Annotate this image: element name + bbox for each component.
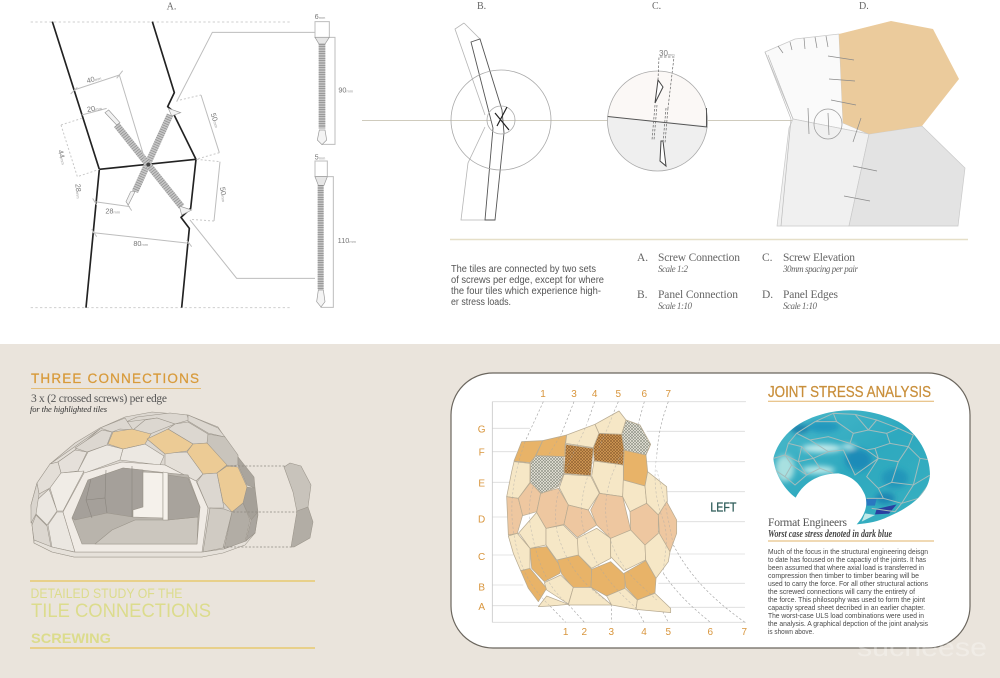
legend: D. — [762, 289, 773, 301]
analysis body text: been assumed that where axial load is transferred in — [768, 563, 924, 572]
screw 90mm: 6mm — [315, 12, 326, 21]
column numbers top: 3 — [571, 389, 577, 400]
dome caption — [768, 517, 934, 541]
column numbers top — [540, 389, 672, 400]
callout lines — [177, 32, 315, 278]
row letters: D — [478, 514, 485, 525]
screw 110mm — [315, 153, 357, 307]
dimensions: 50 mm — [218, 186, 229, 203]
legend: Scale 1:10 — [658, 301, 692, 311]
row letters — [478, 425, 486, 613]
column numbers bottom: 4 — [641, 627, 647, 638]
orange tile — [839, 21, 959, 134]
joint lines — [773, 413, 930, 512]
removed tiles — [284, 463, 313, 547]
legend: C. — [762, 252, 773, 264]
tile map chart — [478, 389, 748, 638]
door opening — [72, 466, 200, 544]
screw marks — [778, 36, 877, 201]
lower pale tile — [777, 119, 869, 226]
background: lower beige band — [0, 344, 1000, 678]
screw 110mm: 110mm — [338, 236, 357, 245]
column numbers bottom: 2 — [582, 627, 588, 638]
row letters: F — [479, 447, 485, 458]
subtitle block: SCREWING — [31, 630, 111, 646]
intro text: of screws per edge, except for where — [451, 275, 604, 286]
legend — [637, 252, 858, 311]
legend: A. — [637, 252, 648, 264]
legend: Scale 1:2 — [658, 264, 688, 274]
analysis body text: the force. This philosophy was used to form the joint — [768, 595, 926, 604]
base strip — [34, 533, 255, 557]
column numbers bottom: 5 — [666, 627, 672, 638]
column numbers top: 6 — [642, 389, 648, 400]
left label: LEFT — [710, 499, 736, 514]
analysis body text: the analysis. A graphical depction of the joint analysis — [768, 619, 928, 628]
watermark: sucheese — [857, 632, 987, 662]
screw 90mm — [315, 12, 354, 145]
column numbers bottom: 3 — [609, 627, 615, 638]
horizontal section line — [362, 120, 793, 122]
legend: B. — [637, 289, 648, 301]
intro text: er stress loads. — [451, 297, 511, 308]
legend: Screw Connection — [658, 252, 740, 264]
left edge and circle — [765, 52, 793, 226]
dashed projection lines — [223, 466, 297, 547]
row letters: B — [478, 582, 485, 593]
heading: three connections: for the highlighted tiles — [30, 404, 108, 414]
screw cross — [105, 108, 192, 215]
analysis body text: The worst-case ULS load combinations were used in — [768, 611, 924, 620]
legend: Screw Elevation — [783, 252, 855, 264]
white rounded panel — [451, 373, 970, 648]
crossed screws — [495, 107, 509, 130]
subtitle block — [30, 581, 315, 648]
circle lower half — [607, 116, 707, 171]
legend: 30mm spacing per pair — [782, 264, 858, 274]
analysis body text — [768, 547, 928, 636]
panel B: panel connection — [451, 1, 551, 220]
panel C: screw elevation — [607, 1, 708, 171]
column numbers bottom — [563, 627, 748, 638]
heading: three connections: 3 x (2 crossed screws) per edge — [31, 393, 167, 405]
circle upper half — [608, 71, 708, 126]
tile outlines — [52, 22, 196, 308]
analysis body text: to date has focused on the capactiy of the joints. It has — [768, 555, 926, 564]
column numbers bottom: 7 — [742, 627, 748, 638]
row letters: A — [478, 602, 485, 613]
highlighted orange tiles — [108, 429, 247, 512]
legend: Panel Connection — [658, 289, 738, 301]
column numbers top: 4 — [592, 389, 598, 400]
label A: A. — [167, 1, 176, 12]
analysis body text: Much of the focus in the structural engineering deisgn — [768, 547, 928, 556]
dotted limits — [31, 22, 291, 308]
legend: Panel Edges — [783, 289, 839, 301]
legend: Scale 1:10 — [783, 301, 818, 311]
dome caption: Worst case stress denoted in dark blue — [768, 529, 892, 540]
scale circles — [451, 70, 551, 170]
screws — [655, 80, 666, 166]
tiles — [507, 411, 677, 613]
upper and side tiles — [31, 413, 258, 552]
panel D: panel edges — [765, 1, 965, 226]
dashed curves over tiles — [512, 413, 673, 609]
intro text: The tiles are connected by two sets — [451, 264, 596, 275]
stress dome render — [773, 410, 930, 524]
dimensions: 50 mm — [209, 112, 222, 129]
dimensions: 20mm — [86, 103, 103, 114]
dark grey tile — [849, 126, 965, 226]
intro text: the four tiles which experience high- — [451, 286, 601, 297]
tile section — [455, 23, 495, 220]
intro text — [451, 264, 604, 308]
analysis body text: compression then timber to timber bearing will be — [768, 571, 919, 580]
dimensions: 28 mm — [73, 183, 84, 200]
dimensions: 40mm — [86, 73, 103, 85]
dashed grid curves outside tiles — [525, 402, 745, 622]
upper white tile — [765, 34, 869, 134]
row letters: C — [478, 552, 485, 563]
label D: D. — [859, 1, 869, 12]
subtitle block: DETAILED STUDY OF THE — [30, 585, 182, 601]
column numbers top: 7 — [666, 389, 672, 400]
heading: three connections — [30, 371, 201, 414]
label C: C. — [652, 1, 661, 12]
door frame — [63, 462, 208, 552]
joint stress heading: JOINT STRESS ANALYSIS — [768, 384, 931, 401]
dimensions — [56, 71, 229, 248]
hatched high stress tiles — [622, 420, 651, 455]
analysis body text: used to carry the force. For all other structural actions — [768, 579, 928, 588]
dome illustration — [31, 412, 313, 557]
column numbers bottom: 1 — [563, 627, 569, 638]
row letters: G — [478, 425, 486, 436]
row letters: E — [478, 479, 485, 490]
chart frame and row lines — [492, 402, 746, 622]
heading: three connections: THREE CONNECTIONS — [31, 371, 199, 386]
column numbers top: 1 — [540, 389, 546, 400]
column numbers bottom: 6 — [708, 627, 714, 638]
label B: B. — [477, 1, 486, 12]
screw 90mm: 90mm — [338, 86, 354, 95]
dimensions: 28mm — [105, 206, 121, 215]
analysis body text: the screwed connections will carry the entirety of — [768, 587, 916, 596]
analysis body text: is shown above. — [768, 627, 814, 636]
divider — [450, 238, 968, 240]
dimensions: 80mm — [133, 239, 149, 248]
subtitle block: TILE CONNECTIONS — [31, 601, 211, 622]
dimensions: 44 mm — [56, 149, 69, 166]
analysis body text: capactiy spread sheet decribed in an earlier chapter. — [768, 603, 925, 612]
panel A: screw connection detail — [31, 1, 357, 308]
column numbers top: 5 — [616, 389, 622, 400]
dome caption: Format Engineers — [768, 517, 848, 529]
dimension: 30mm — [659, 49, 675, 58]
screw 110mm: 5mm — [315, 153, 326, 162]
